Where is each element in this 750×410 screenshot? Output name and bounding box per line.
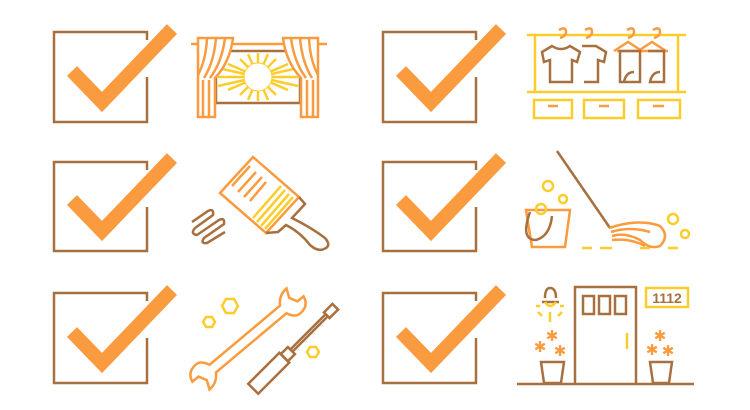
icon: front door with lamp, plants and house number: ✱: [662, 342, 674, 360]
screwdriver: [248, 302, 340, 394]
icon: wrench, screwdriver and nuts: [185, 283, 340, 395]
icon: front door with lamp, plants and house number: ✱: [646, 341, 658, 359]
icon: wardrobe with clothes: [527, 28, 686, 118]
checkbox row3 left: [54, 290, 172, 383]
icon: front door with lamp, plants and house number: ✱: [554, 342, 566, 360]
checkbox row3 right: [383, 290, 501, 383]
icon: front door with lamp, plants and house number: ✱: [654, 327, 666, 345]
wrench: [185, 283, 311, 395]
checkbox row2 right: [383, 158, 501, 251]
house number: [646, 288, 688, 307]
icon: paint brush: [192, 157, 328, 250]
checkbox row1 right: [383, 29, 501, 122]
icon: front door with lamp, plants and house number: [517, 287, 694, 384]
icon: front door with lamp, plants and house number: ✱: [546, 327, 558, 345]
checkbox row2 left: [54, 158, 172, 251]
checkbox row1 left: [54, 29, 172, 122]
house number: 1112: [652, 290, 682, 306]
icon: front door with lamp, plants and house number: ✱: [534, 338, 546, 356]
icon: mop and bucket: [526, 151, 689, 248]
icon: window with curtains and sun: [191, 38, 327, 117]
